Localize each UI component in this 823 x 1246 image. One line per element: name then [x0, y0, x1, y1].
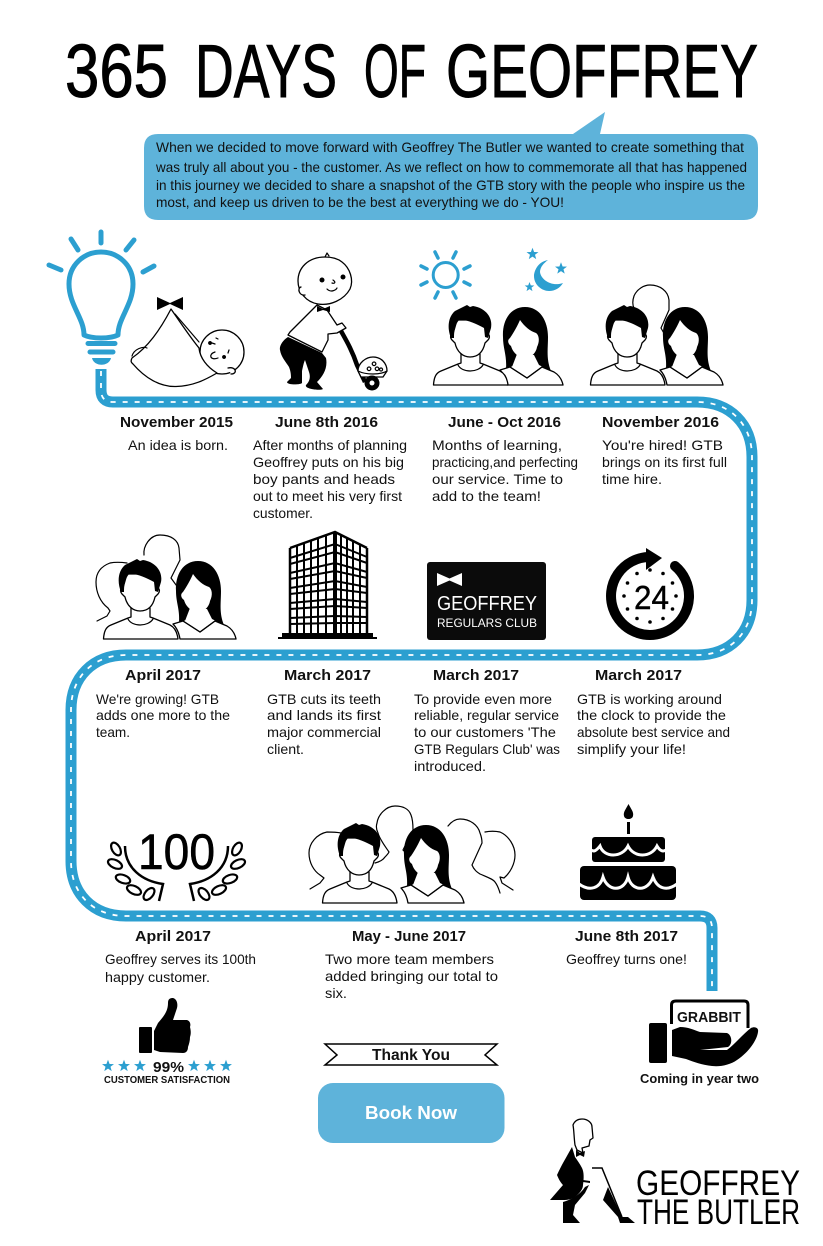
icon: sun — [421, 252, 470, 298]
text: total of six — [325, 951, 498, 1001]
icon: office building — [278, 532, 377, 639]
text: commercial client: client. — [267, 741, 304, 757]
icon: thumbs up with 99% satisfaction: 99% — [153, 1059, 184, 1076]
text: first hire: brings on its first full — [602, 454, 727, 470]
text: learning and practicing: our service. Time to — [432, 471, 563, 487]
heading: March 2017 around the clock: March 2017 — [595, 667, 682, 684]
text: first hire: time hire. — [602, 471, 662, 487]
icon: Grabbit hand, coming in year two — [640, 1001, 759, 1086]
text: first hire: You're hired! GTB — [602, 437, 723, 453]
intro speech bubble: When we decided to move forward with Geoffrey The Butler we wanted to create something that — [156, 139, 744, 155]
button: book now — [318, 1083, 504, 1143]
icon: 100 laurel wreath — [107, 824, 246, 902]
text: commercial client: and lands its first — [267, 707, 381, 723]
text: learning and practicing: practicing,and perfecting — [432, 454, 578, 470]
text: team growth: adds one more to the — [96, 707, 230, 723]
icon: swaddled baby with bow tie — [131, 297, 244, 387]
title — [65, 29, 758, 113]
title: OF — [364, 29, 426, 113]
text: regulars club: to our customers 'The — [414, 724, 556, 740]
logo: Geoffrey the Butler — [550, 1119, 800, 1232]
icon: two founders — [434, 305, 563, 385]
icon: toddler with push toy — [280, 253, 387, 390]
title: DAYS — [195, 29, 337, 113]
text: first customer: out to meet his very first — [253, 488, 402, 504]
icon: Grabbit hand, coming in year two: Coming in year two — [640, 1072, 759, 1086]
text: commercial client: GTB cuts its teeth — [267, 691, 381, 707]
intro speech bubble — [144, 112, 758, 220]
icon: growing team — [96, 535, 236, 639]
text: regulars club: To provide even more — [414, 691, 552, 707]
text: commercial client — [267, 691, 381, 757]
text: around the clock: simplify your life! — [577, 741, 686, 757]
text: regulars club: GTB Regulars Club' was — [414, 741, 560, 757]
icon: 24 hour clock: 24 — [634, 579, 669, 616]
text: team growth: We're growing! GTB — [96, 691, 219, 707]
icon: regulars club card: REGULARS CLUB — [437, 616, 537, 630]
text: 100th customer: happy customer. — [105, 969, 210, 985]
ribbon: thank you — [325, 1044, 497, 1065]
text: first customer — [253, 437, 407, 521]
heading: November 2016: November 2016 — [602, 414, 719, 431]
text: first customer: After months of planning — [253, 437, 407, 453]
heading: June 8th 2016: June 8th 2016 — [275, 414, 378, 431]
text: commercial client: major commercial — [267, 724, 381, 740]
text: learning and practicing — [432, 437, 578, 504]
timeline road — [71, 369, 752, 991]
text: first customer: Geoffrey puts on his big — [253, 454, 404, 470]
icon: Grabbit hand, coming in year two: GRABBIT — [677, 1009, 741, 1026]
text: around the clock: absolute best service and — [577, 724, 730, 740]
icon: thumbs up with 99% satisfaction: CUSTOMER SATISFACTION — [104, 1075, 230, 1086]
text: team growth: team. — [96, 724, 130, 740]
heading: June - Oct 2016: June - Oct 2016 — [448, 414, 561, 431]
text: Geoffrey turns one: Geoffrey turns one! — [566, 951, 687, 967]
icon: 100 laurel wreath: 100 — [138, 824, 215, 880]
text: regulars club: reliable, regular service — [414, 707, 559, 723]
heading: June 8th 2017: June 8th 2017 — [575, 928, 678, 945]
text: around the clock: GTB is working around — [577, 691, 722, 707]
text: regulars club — [414, 691, 560, 774]
text: regulars club: introduced. — [414, 758, 486, 774]
heading: April 2017 hundredth customer: April 2017 — [135, 928, 211, 945]
intro speech bubble: in this journey we decided to share a snapshot of the GTB story with the people who inspire us the — [156, 177, 745, 193]
text: 100th customer: Geoffrey serves its 100th — [105, 951, 256, 967]
button: book now: Book Now — [365, 1103, 458, 1123]
text: around the clock — [577, 691, 730, 757]
text: around the clock: the clock to provide the — [577, 707, 726, 723]
icon: moon and stars — [525, 248, 567, 291]
text: an idea is born: An idea is born. — [128, 437, 228, 453]
icon: regulars club card: GEOFFREY — [437, 593, 537, 615]
icon: thumbs up with 99% satisfaction — [102, 998, 232, 1086]
icon: 24 hour clock — [611, 548, 689, 635]
icon: full team of six — [309, 806, 515, 903]
text: learning and practicing: Months of learning, — [432, 437, 562, 453]
ribbon: thank you: Thank You — [372, 1047, 450, 1064]
text: first customer: customer. — [253, 505, 313, 521]
text: total of six: six. — [325, 985, 347, 1001]
heading: November 2015: November 2015 — [120, 414, 233, 431]
text: 100th customer — [105, 951, 256, 985]
text: team growth — [96, 691, 230, 740]
title: 365 — [65, 29, 168, 113]
icon: birthday cake — [579, 804, 677, 900]
text: total of six: Two more team members — [325, 951, 494, 967]
logo: Geoffrey the Butler: GEOFFREY — [636, 1164, 800, 1203]
intro speech bubble: most, and keep us driven to be the best at everything we do - YOU! — [156, 194, 564, 210]
icon: light bulb — [49, 232, 154, 365]
text: first hire — [602, 437, 727, 487]
heading: May - June 2017: May - June 2017 — [352, 928, 466, 945]
intro speech bubble: was truly all about you - the customer. As we reflect on how to commemorate all that has happened — [155, 159, 747, 175]
heading: April 2017: April 2017 — [125, 667, 201, 684]
heading: March 2017 commercial: March 2017 — [284, 667, 371, 684]
icon: team with first hire — [590, 285, 723, 385]
text: learning and practicing: add to the team! — [432, 488, 541, 504]
text: first customer: boy pants and heads — [253, 471, 395, 487]
icon: regulars club card — [427, 562, 546, 640]
text: total of six: added bringing our total to — [325, 968, 498, 984]
heading: March 2017 regulars: March 2017 — [433, 667, 519, 684]
